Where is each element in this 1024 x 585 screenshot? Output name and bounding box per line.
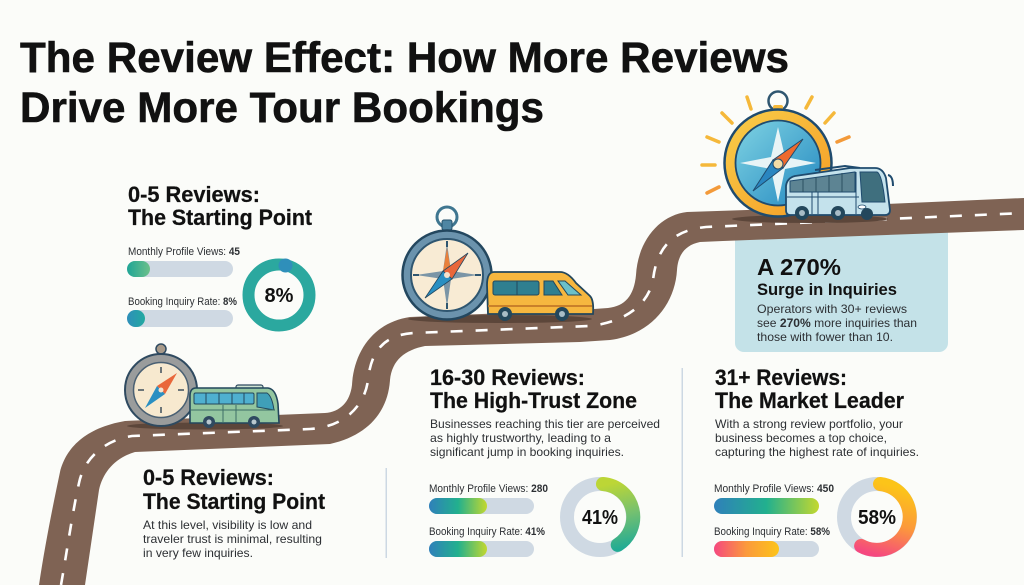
text block: starting point description: At this level, visibility is low and xyxy=(143,518,312,532)
heading: starting point stats: 0-5 Reviews: xyxy=(128,182,260,207)
icon: medium compass xyxy=(402,207,492,320)
donut: 41% xyxy=(567,484,633,550)
text block: starting point description: The Starting Point xyxy=(143,489,326,514)
title: Drive More Tour Bookings xyxy=(20,84,544,132)
text block: high-trust zone: as highly trustworthy, leading to a xyxy=(430,431,611,445)
text block: market leader: The Market Leader xyxy=(715,388,904,413)
icon: small compass and green bus xyxy=(125,344,283,430)
panel: 270% surge callout: Operators with 30+ reviews xyxy=(757,302,907,316)
icon: yellow van xyxy=(487,272,593,321)
text block: market leader: 31+ Reviews: xyxy=(715,365,847,390)
icon: sun rays xyxy=(702,97,849,193)
panel: 270% surge callout: see 270% more inquiries than xyxy=(757,316,917,330)
bar: booking inquiry rate 41% xyxy=(429,526,545,557)
panel: 270% surge callout xyxy=(735,215,948,352)
text block: high-trust zone xyxy=(430,365,660,459)
bar: monthly profile views 450 xyxy=(714,483,834,514)
bar: booking inquiry rate 8%: Booking Inquiry Rate: 8% xyxy=(128,296,237,308)
donut: 8%: 8% xyxy=(265,285,294,307)
bar: monthly profile views 45: Monthly Profile Views: 45 xyxy=(128,246,240,258)
panel: market leader stats xyxy=(714,483,910,557)
donut: 58% xyxy=(844,484,910,550)
icon: coach bus xyxy=(786,166,893,220)
title: The Review Effect: How More Reviews xyxy=(20,34,789,82)
bar: monthly profile views 45 xyxy=(127,246,240,277)
text block: market leader xyxy=(715,365,919,459)
text block: high-trust zone: The High-Trust Zone xyxy=(430,388,637,413)
panel: 270% surge callout: those with fower than 10. xyxy=(757,330,893,344)
bar: monthly profile views 450: Monthly Profile Views: 450 xyxy=(714,483,834,495)
text block: market leader: capturing the highest rate of inquiries. xyxy=(715,445,919,459)
donut: 8% xyxy=(248,258,310,326)
text block: market leader: business becomes a top choice, xyxy=(715,431,887,445)
bar: booking inquiry rate 8% xyxy=(127,296,237,327)
icon: large compass with rays and coach xyxy=(702,92,893,223)
donut: 41%: 41% xyxy=(582,507,618,529)
winding road xyxy=(39,198,1024,585)
icon: small compass xyxy=(125,344,197,426)
bar: monthly profile views 280: Monthly Profile Views: 280 xyxy=(429,483,548,495)
title xyxy=(20,34,789,132)
bar: booking inquiry rate 41%: Booking Inquiry Rate: 41% xyxy=(429,526,545,538)
text block: market leader: With a strong review portfolio, your xyxy=(715,417,903,431)
text block: high-trust zone: 16-30 Reviews: xyxy=(430,365,585,390)
icon: large compass xyxy=(724,92,832,216)
text block: high-trust zone: significant jump in booking inquiries. xyxy=(430,445,624,459)
icon: green bus xyxy=(190,385,279,428)
text block: starting point description: 0-5 Reviews: xyxy=(143,465,274,490)
bar: booking inquiry rate 58% xyxy=(714,526,830,557)
panel: 270% surge callout: A 270% xyxy=(757,254,841,280)
text block: starting point description: traveler trust is minimal, resulting xyxy=(143,532,322,546)
text block: high-trust zone: Businesses reaching this tier are perceived xyxy=(430,417,660,431)
icon: medium compass and yellow van xyxy=(402,207,593,323)
panel: 270% surge callout: Surge in Inquiries xyxy=(757,280,897,299)
heading: starting point stats: The Starting Point xyxy=(128,205,313,230)
panel: starting point stats xyxy=(127,182,313,327)
text block: starting point description xyxy=(143,465,326,560)
heading: starting point stats xyxy=(128,182,313,230)
bar: monthly profile views 280 xyxy=(429,483,548,514)
text block: starting point description: in very few inquiries. xyxy=(143,546,253,560)
bar: booking inquiry rate 58%: Booking Inquiry Rate: 58% xyxy=(714,526,830,538)
panel: high-trust stats xyxy=(429,483,633,557)
donut: 58%: 58% xyxy=(858,507,896,529)
